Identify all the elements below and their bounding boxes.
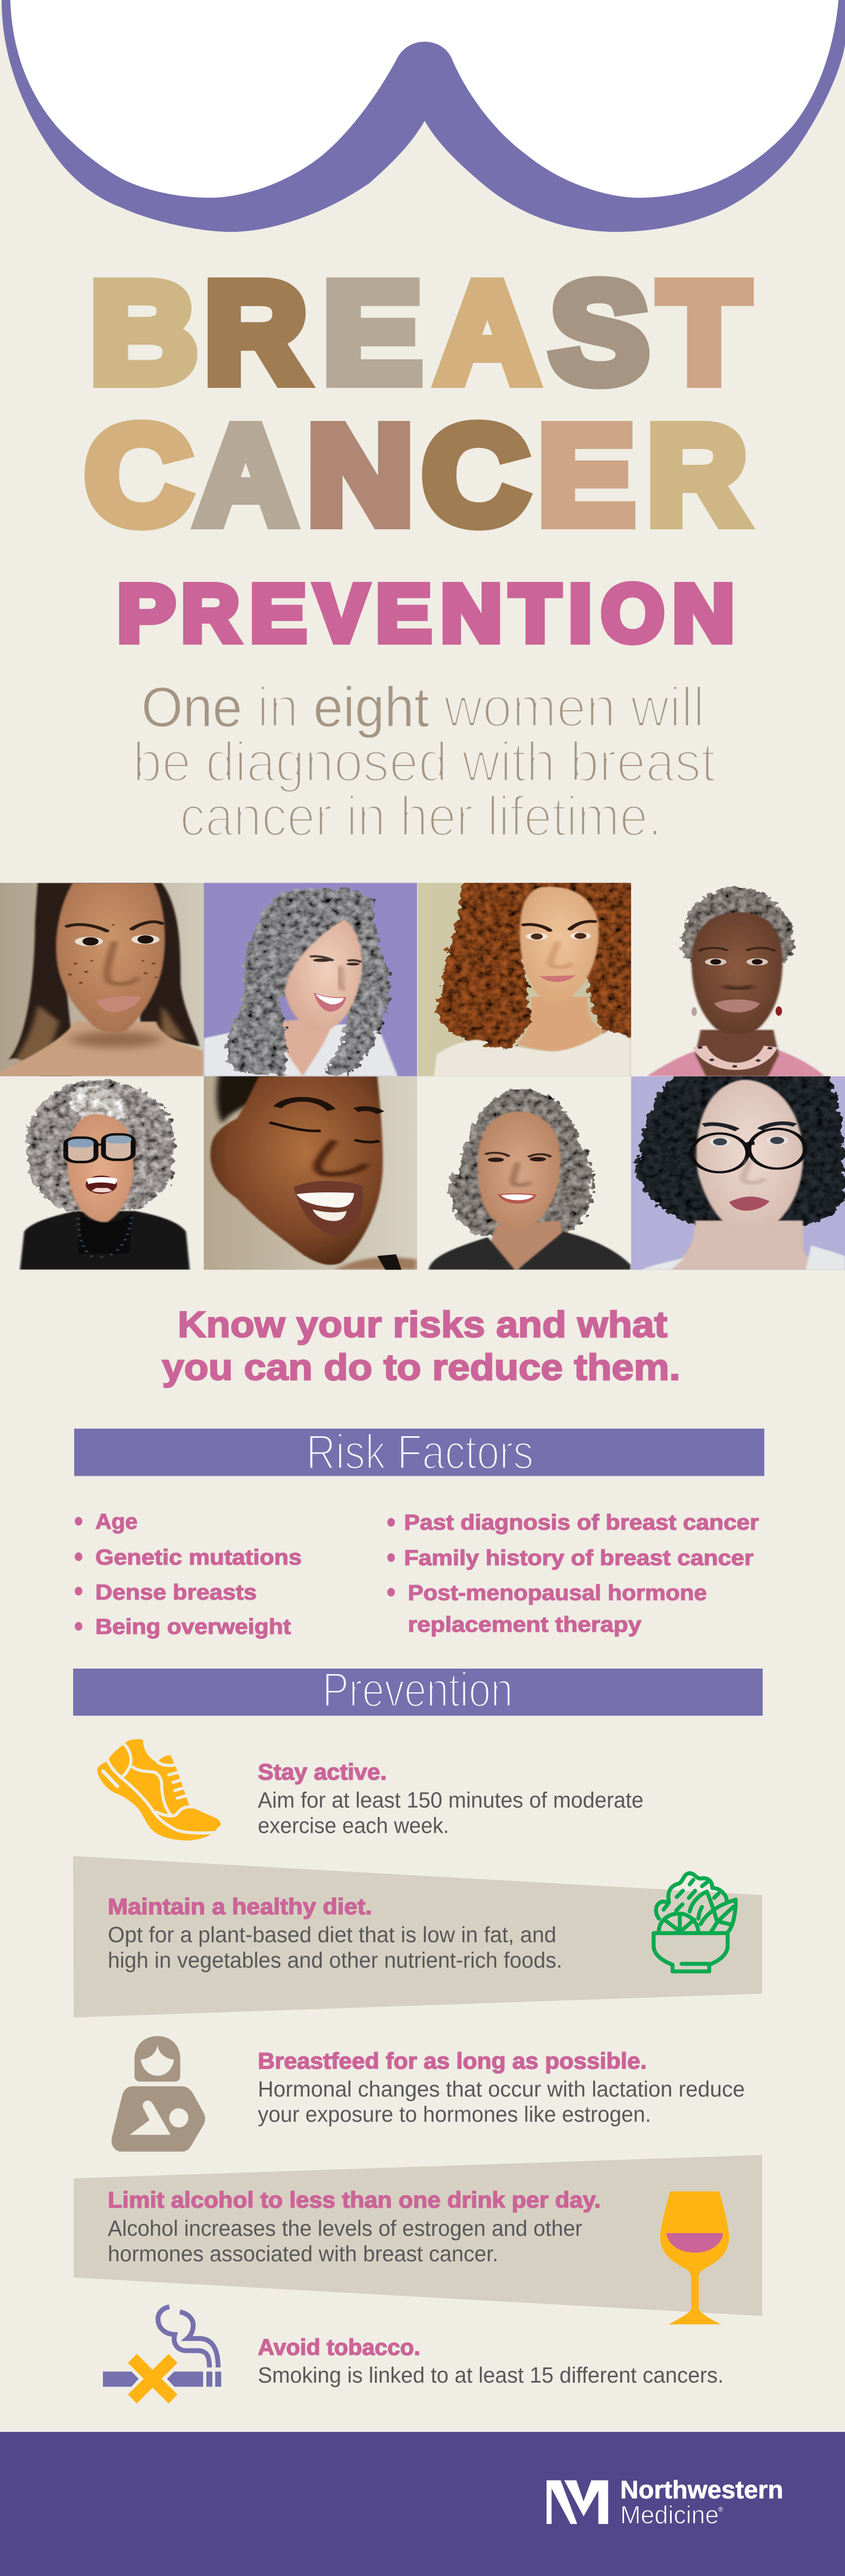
tip: breastfeed: your exposure to hormones like estrogen.	[258, 2102, 651, 2127]
title: BREAST: R	[205, 253, 307, 412]
portrait: young woman with glasses	[631, 1073, 845, 1270]
tip: breastfeed: Breastfeed for as long as possible.	[258, 2048, 647, 2074]
tip: limit alcohol: Alcohol increases the levels of estrogen and other	[108, 2216, 582, 2241]
intro statement: be diagnosed with breast	[133, 731, 716, 794]
photo grid of eight women	[0, 881, 845, 1270]
icon: breasts outline	[2, 0, 845, 232]
heading bar: Prevention: Prevention	[322, 1663, 513, 1717]
panel: healthy diet band	[73, 1856, 762, 2017]
title: PREVENTION: R	[181, 569, 239, 658]
heading bar: Risk Factors	[74, 1425, 764, 1480]
title: CANCER: A	[196, 397, 296, 553]
portrait: smiling woman with closed eyes	[204, 1074, 417, 1270]
title: BREAST: S	[550, 253, 648, 412]
risk factors list: left column: Dense breasts	[95, 1581, 257, 1605]
title: CANCER: R	[647, 397, 747, 553]
logo: Northwestern Medicine: ®	[718, 2506, 723, 2513]
risk factors list: right column: Family history of breast cancer	[404, 1546, 753, 1570]
tip: maintain a healthy diet: Opt for a plant-based diet that is low in fat, and	[108, 1922, 556, 1947]
title: BREAST: A	[437, 254, 538, 412]
title: PREVENTION: N	[673, 568, 734, 658]
logo: Northwestern Medicine: Northwestern	[620, 2476, 783, 2504]
risk factors list: right column: Past diagnosis of breast cancer	[404, 1510, 759, 1534]
title: PREVENTION	[117, 568, 734, 659]
portrait: woman in dark jacket	[427, 1089, 631, 1270]
portrait: laughing woman with grey curls	[204, 883, 417, 1076]
intro statement	[133, 676, 716, 848]
risk factors list: right column	[387, 1510, 759, 1637]
tip: maintain a healthy diet	[108, 1894, 562, 1972]
title: PREVENTION: E	[376, 568, 431, 659]
tip: limit alcohol: hormones associated with breast cancer.	[108, 2241, 498, 2266]
icon: running shoe	[97, 1739, 220, 1840]
risk factors list: right column: Post-menopausal hormone	[408, 1581, 707, 1605]
title: PREVENTION: E	[250, 568, 306, 659]
title: PREVENTION: N	[441, 569, 502, 658]
risk factors list: left column	[75, 1510, 302, 1639]
icon: wine glass	[660, 2191, 729, 2324]
icon: salad bowl	[654, 1873, 736, 1971]
icon: no smoking	[103, 2307, 221, 2404]
risk factors list: left column: Age	[95, 1510, 138, 1534]
portrait: laughing woman with glasses	[0, 1076, 204, 1270]
portrait: woman with red curls	[418, 881, 636, 1076]
tip: breastfeed	[258, 2048, 745, 2127]
title: CANCER	[85, 397, 747, 553]
title: PREVENTION: I	[569, 568, 592, 658]
tip: avoid tobacco: Avoid tobacco.	[258, 2334, 420, 2360]
title: CANCER: N	[307, 397, 413, 553]
title: PREVENTION: V	[315, 568, 368, 659]
headline: know your risks: Know your risks and what	[178, 1304, 667, 1345]
tip: avoid tobacco: Smoking is linked to at least 15 different cancers.	[258, 2363, 724, 2387]
headline: know your risks	[162, 1304, 680, 1388]
tip: stay active	[258, 1759, 644, 1838]
title: BREAST: T	[660, 254, 749, 412]
tip: stay active: Stay active.	[258, 1759, 387, 1785]
tip: stay active: Aim for at least 150 minutes of moderate	[258, 1788, 644, 1813]
title: BREAST: B	[90, 253, 198, 412]
panel: alcohol band	[74, 2155, 762, 2316]
tip: breastfeed: Hormonal changes that occur with lactation reduce	[258, 2077, 745, 2101]
intro statement: cancer in her lifetime.	[180, 786, 662, 848]
tip: avoid tobacco	[258, 2334, 724, 2387]
tip: maintain a healthy diet: Maintain a healthy diet.	[108, 1894, 372, 1919]
heading bar: Risk Factors: Risk Factors	[306, 1425, 534, 1480]
icon: breastfeeding mother	[112, 2036, 205, 2152]
risk factors list: left column: Genetic mutations	[95, 1546, 302, 1569]
portrait: older woman with choker	[631, 883, 845, 1076]
tip: limit alcohol	[108, 2187, 601, 2266]
logo: Northwestern Medicine	[547, 2476, 783, 2529]
title: CANCER: E	[538, 398, 634, 553]
tip: limit alcohol: Limit alcohol to less than one drink per day.	[108, 2187, 601, 2212]
footer band	[0, 2432, 845, 2576]
title: CANCER: C	[85, 398, 191, 553]
title: PREVENTION: T	[510, 568, 560, 658]
heading bar: Prevention	[73, 1663, 763, 1717]
title: BREAST	[90, 253, 749, 412]
tip: stay active: exercise each week.	[258, 1813, 449, 1838]
title: PREVENTION: P	[117, 568, 175, 658]
portrait: freckled woman	[0, 883, 204, 1076]
title: PREVENTION: O	[601, 568, 664, 658]
tip: maintain a healthy diet: high in vegetables and other nutrient-rich foods.	[108, 1948, 562, 1972]
headline: know your risks: you can do to reduce them.	[162, 1347, 680, 1388]
logo: Northwestern Medicine: Medicine	[620, 2501, 719, 2529]
risk factors list: right column: replacement therapy	[408, 1613, 642, 1637]
title: BREAST: E	[323, 253, 421, 412]
intro statement: One in eight women will	[141, 676, 705, 739]
risk factors list: left column: Being overweight	[95, 1615, 291, 1639]
title: CANCER: C	[422, 397, 528, 553]
